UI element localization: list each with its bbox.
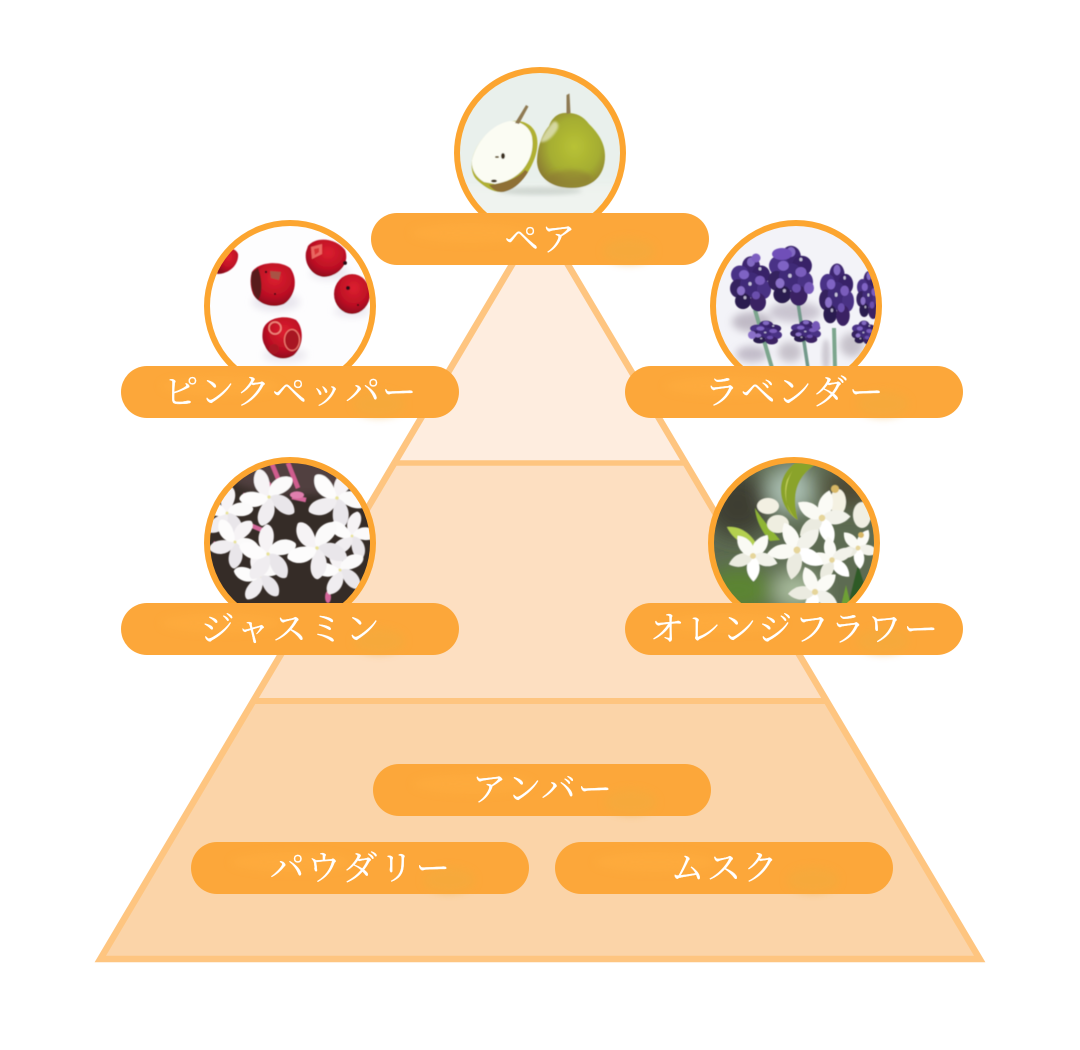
berry	[251, 263, 295, 306]
photo circle: orange flower	[708, 457, 880, 603]
jasmine blossoms	[238, 468, 296, 527]
photo circle: lavender	[713, 223, 881, 389]
label: amber	[373, 764, 711, 816]
pyramid tier: base	[100, 701, 980, 959]
label: pink pepper: ピンクペッパー	[164, 374, 418, 412]
label: powdery: パウダリー	[270, 850, 452, 888]
photo circle: jasmine	[204, 457, 376, 603]
label: pear	[371, 213, 709, 265]
label: pear: ペア	[504, 221, 578, 259]
label: musk: ムスク	[670, 850, 780, 888]
whole pear	[537, 113, 605, 188]
stems	[755, 310, 772, 368]
label: amber: アンバー	[472, 771, 614, 809]
photo circle: pear	[454, 67, 626, 213]
pyramid tier: top	[394, 218, 686, 463]
label: lavender	[625, 366, 963, 418]
pyramid	[100, 218, 980, 959]
berry	[334, 274, 370, 314]
orange blossoms	[757, 498, 779, 514]
leaves	[781, 463, 816, 520]
lavender spikes	[730, 256, 771, 311]
berry	[217, 247, 238, 274]
photo circle: pink pepper	[207, 223, 373, 389]
pyramid tier: middle	[253, 463, 827, 701]
label: orange flower	[625, 603, 963, 655]
label: pink pepper	[121, 366, 459, 418]
label: lavender: ラベンダー	[704, 374, 886, 412]
label: jasmine: ジャスミン	[200, 611, 382, 649]
label: musk	[555, 842, 893, 894]
berry	[262, 317, 302, 358]
berry	[306, 240, 346, 277]
label: jasmine	[121, 603, 459, 655]
label: orange flower: オレンジフラワー	[650, 611, 940, 649]
half pear	[472, 121, 537, 192]
label: powdery	[191, 842, 529, 894]
